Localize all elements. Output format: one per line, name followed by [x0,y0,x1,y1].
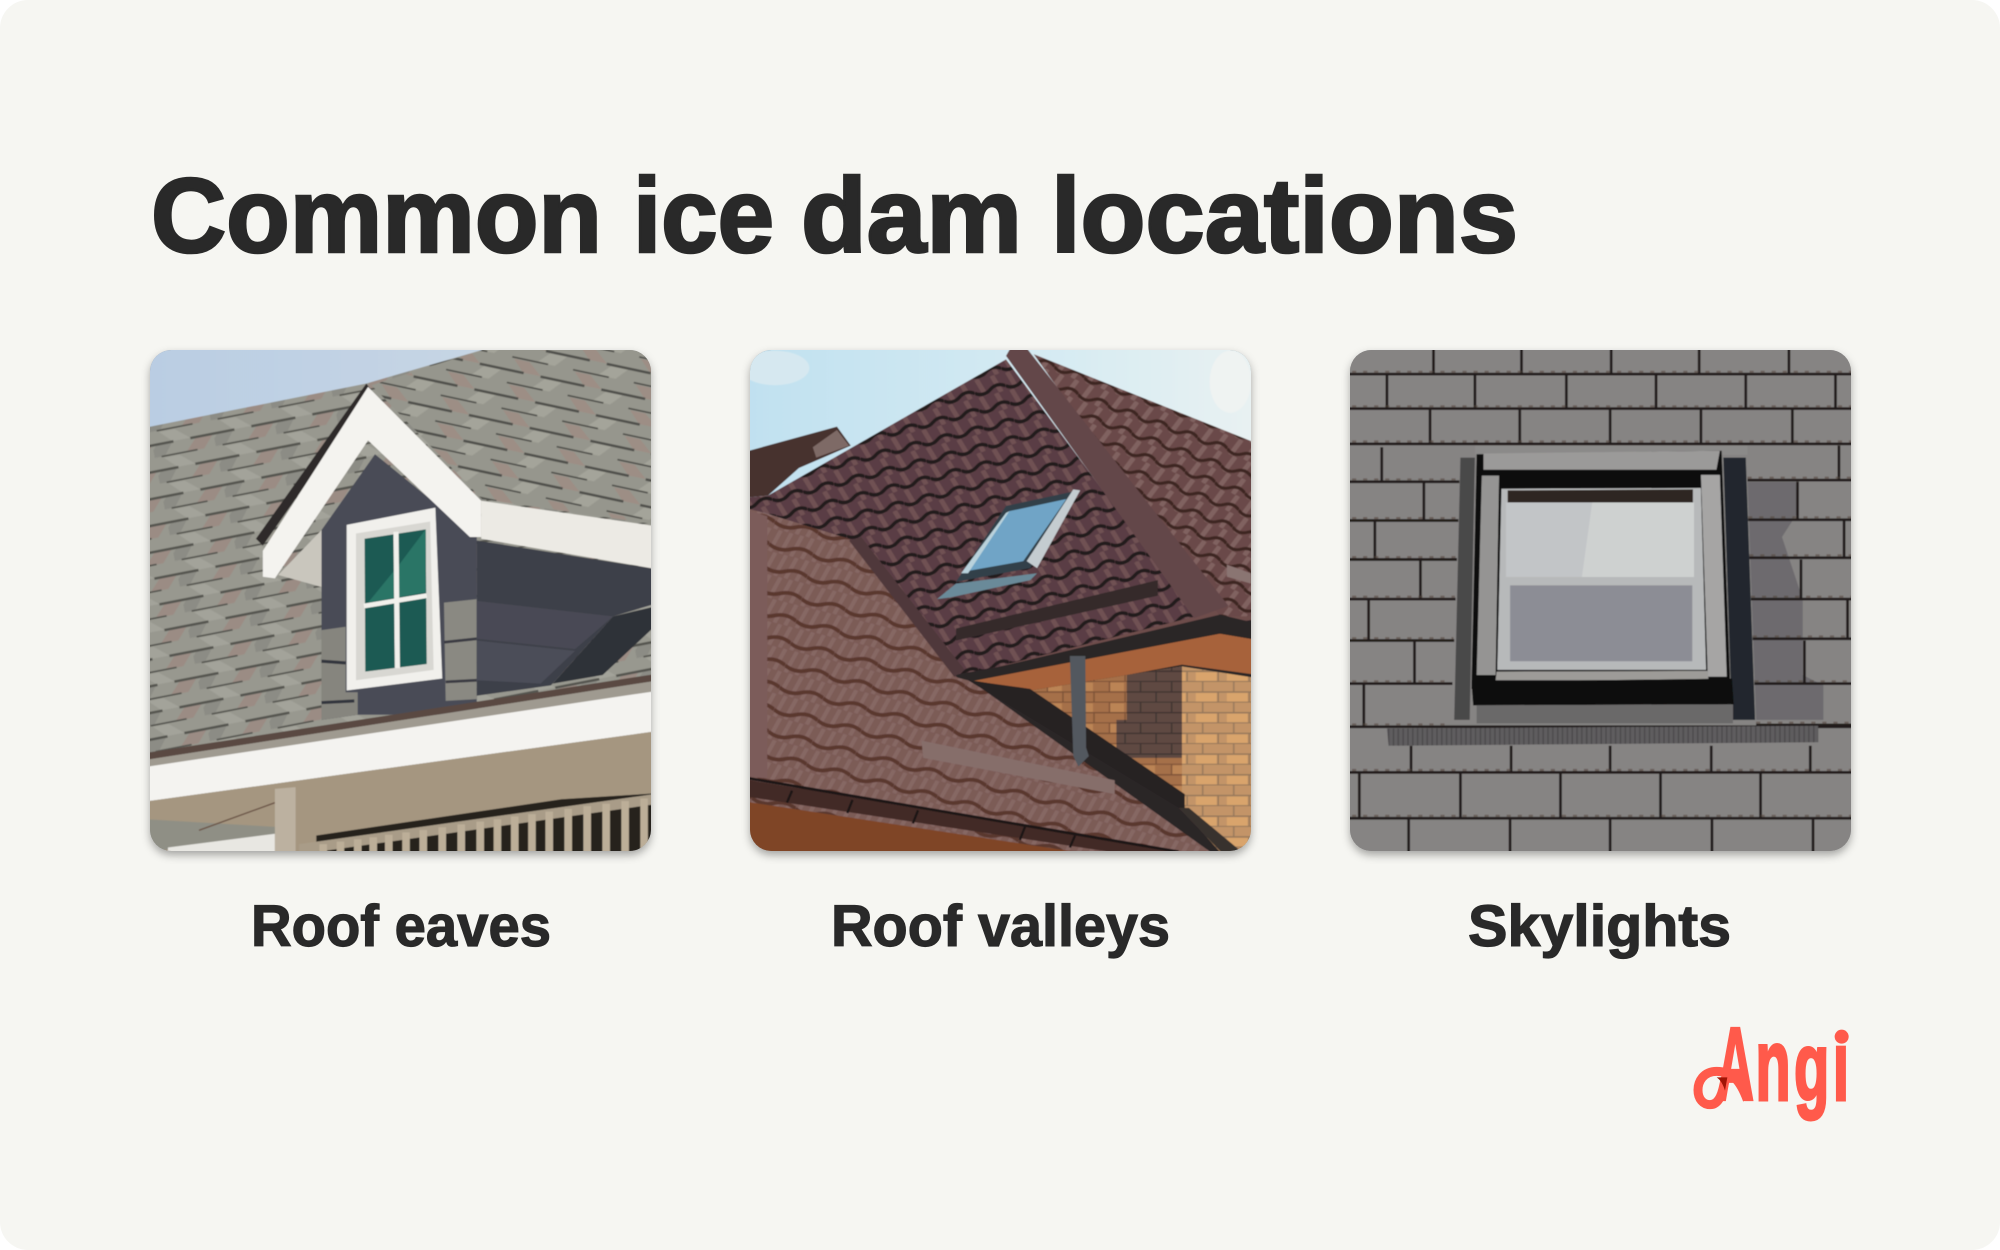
logo: Angi: A [1717,1007,1754,1123]
logo: Angi: n [1755,1006,1791,1122]
logo: Angi: g [1794,1012,1829,1120]
photo: brown tile roof with skylight [744,349,1256,860]
label: Roof valleys: Roof valleys [831,894,1170,959]
photo: dormer on a shingled roof [144,349,656,860]
logo: Angi [1698,1006,1853,1123]
panel: roof eaves [130,330,671,959]
title: dam [801,157,1022,275]
title: Common [151,157,602,275]
logo: Angi: i [1833,1006,1849,1122]
panel: skylights [1330,330,1871,959]
panel: roof valleys [730,330,1271,959]
label: Roof eaves: Roof eaves [251,894,551,959]
label: Skylights: Skylights [1468,894,1731,959]
title: locations [1051,157,1518,275]
title: ice [633,157,774,275]
photo: skylight in slate roof [1344,349,1856,860]
